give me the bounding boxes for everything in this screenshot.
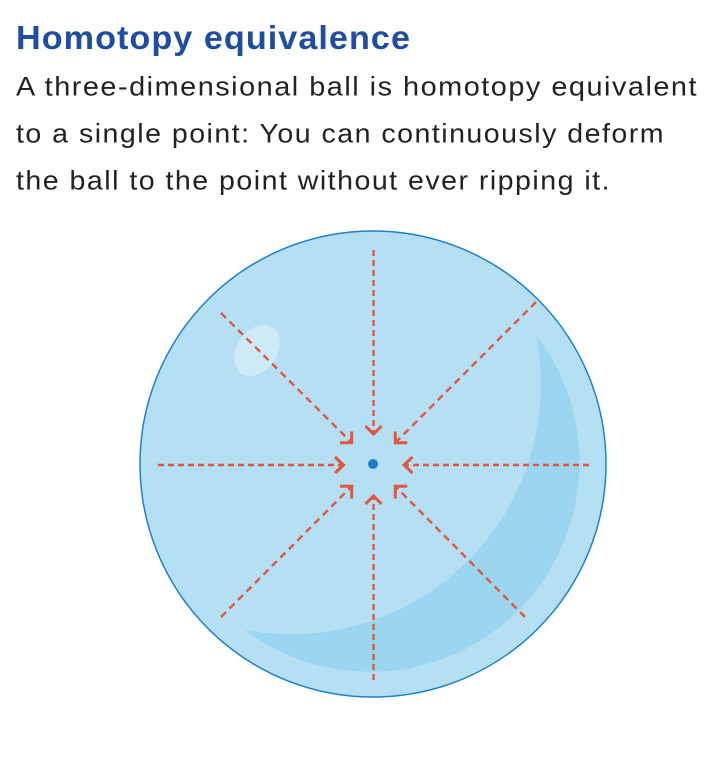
arrow: from top <box>366 250 382 434</box>
ball <box>140 231 606 697</box>
arrow: from left <box>158 457 344 473</box>
arrow: from bottom right <box>395 486 525 617</box>
arrow: from top left <box>221 313 352 443</box>
highlight <box>225 316 289 385</box>
text block: description: the ball to the point without ever ripping it. <box>16 166 611 196</box>
crescent shading <box>245 335 580 672</box>
diagram: ball contracting to a point <box>140 231 606 697</box>
text block: description <box>16 72 698 196</box>
arrows pointing to the centre <box>158 250 589 680</box>
arrow: from bottom left <box>221 486 352 617</box>
arrow: from top right <box>395 302 536 443</box>
arrow: from bottom <box>366 496 382 680</box>
text block: description: A three-dimensional ball is homotopy equivalent <box>16 72 698 102</box>
text block: description: to a single point: You can continuously deform <box>16 118 665 148</box>
arrow: from right <box>404 457 589 473</box>
centre point <box>368 459 378 469</box>
title: Homotopy equivalence <box>16 19 411 56</box>
